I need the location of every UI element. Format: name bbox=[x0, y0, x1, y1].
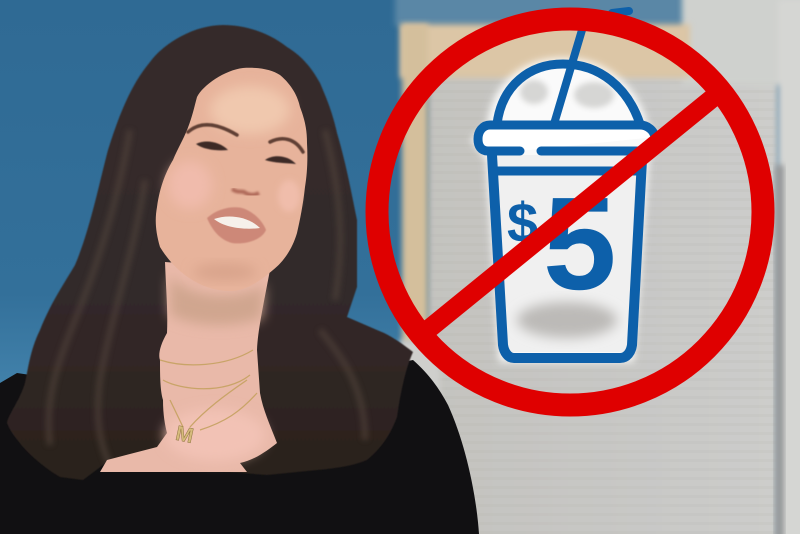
dome fill bbox=[497, 62, 640, 124]
dollar and five labels: $ bbox=[507, 191, 538, 254]
woman bbox=[0, 25, 479, 534]
eyes bbox=[196, 142, 296, 164]
neck shadow bbox=[170, 275, 264, 325]
nose bbox=[232, 189, 259, 195]
dollar and five labels bbox=[507, 170, 616, 317]
hair bbox=[7, 25, 413, 480]
cup white halo bbox=[476, 62, 655, 358]
dollar and five labels: 5 bbox=[543, 170, 616, 317]
brows bbox=[188, 125, 303, 152]
prohibition sign bbox=[377, 19, 763, 405]
hair highlights bbox=[49, 130, 365, 465]
mouth bbox=[207, 207, 266, 243]
black top bbox=[0, 360, 479, 534]
cup body fill bbox=[492, 155, 641, 352]
icon: $5 cup bbox=[476, 11, 655, 358]
face bbox=[156, 68, 307, 291]
necklaces bbox=[160, 350, 257, 430]
dome grey patches bbox=[520, 80, 614, 108]
necklace letter pendant: M bbox=[174, 422, 195, 448]
cup outline bbox=[478, 11, 655, 358]
neck and chest bbox=[100, 262, 277, 472]
face shading bbox=[168, 86, 300, 281]
lower grey patch bbox=[517, 302, 617, 338]
chest glow bbox=[165, 409, 265, 461]
